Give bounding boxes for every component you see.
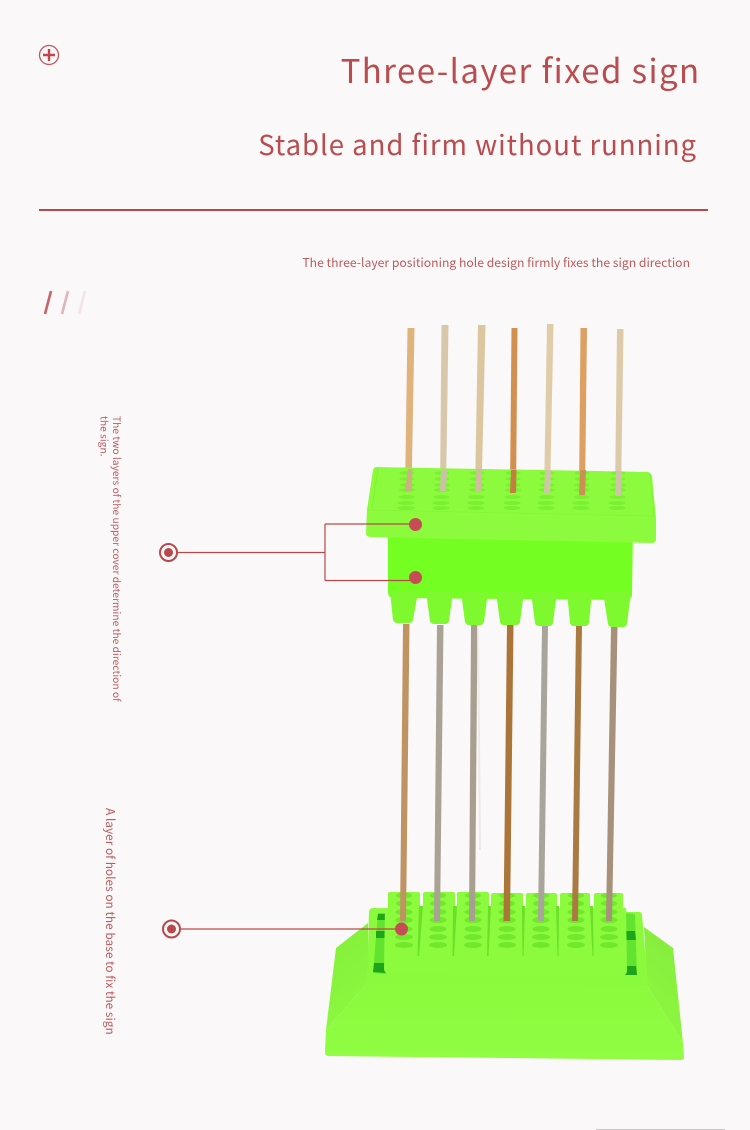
vertical label: upper cover: The two layers of the upper cover determine the direction of xyxy=(110,416,125,701)
lower sticks xyxy=(400,624,618,921)
lid top plate xyxy=(366,467,656,543)
base xyxy=(325,892,684,1060)
bottom edge line xyxy=(596,1128,725,1130)
subtitle: Stable and firm without running xyxy=(258,123,697,163)
icon: three slashes xyxy=(45,291,85,314)
base top rim xyxy=(367,908,648,986)
description: The three-layer positioning hole design firmly fixes the sign direction xyxy=(302,253,690,271)
icon: plus in circle xyxy=(40,46,58,64)
base front face xyxy=(325,982,684,1060)
base gap wedges xyxy=(418,906,594,956)
base left side face xyxy=(326,923,368,1030)
lid stick bases xyxy=(405,469,622,496)
callout: upper cover xyxy=(160,518,422,584)
base dark windows xyxy=(373,913,637,975)
base right side face xyxy=(644,927,683,1043)
lid hole grid xyxy=(398,471,626,510)
base block front xyxy=(384,908,627,976)
vertical label: upper cover: the sign. xyxy=(98,416,112,457)
base block tops xyxy=(388,892,623,913)
title: Three-layer fixed sign xyxy=(341,45,700,93)
divider xyxy=(39,209,708,211)
lower body with pegs xyxy=(388,528,633,627)
upper sticks xyxy=(405,324,624,496)
vertical label: base: A layer of holes on the base to fix the sign xyxy=(102,808,119,1035)
base hole columns xyxy=(395,893,618,948)
vertical label: upper cover xyxy=(98,416,125,702)
callout: base xyxy=(163,920,408,938)
